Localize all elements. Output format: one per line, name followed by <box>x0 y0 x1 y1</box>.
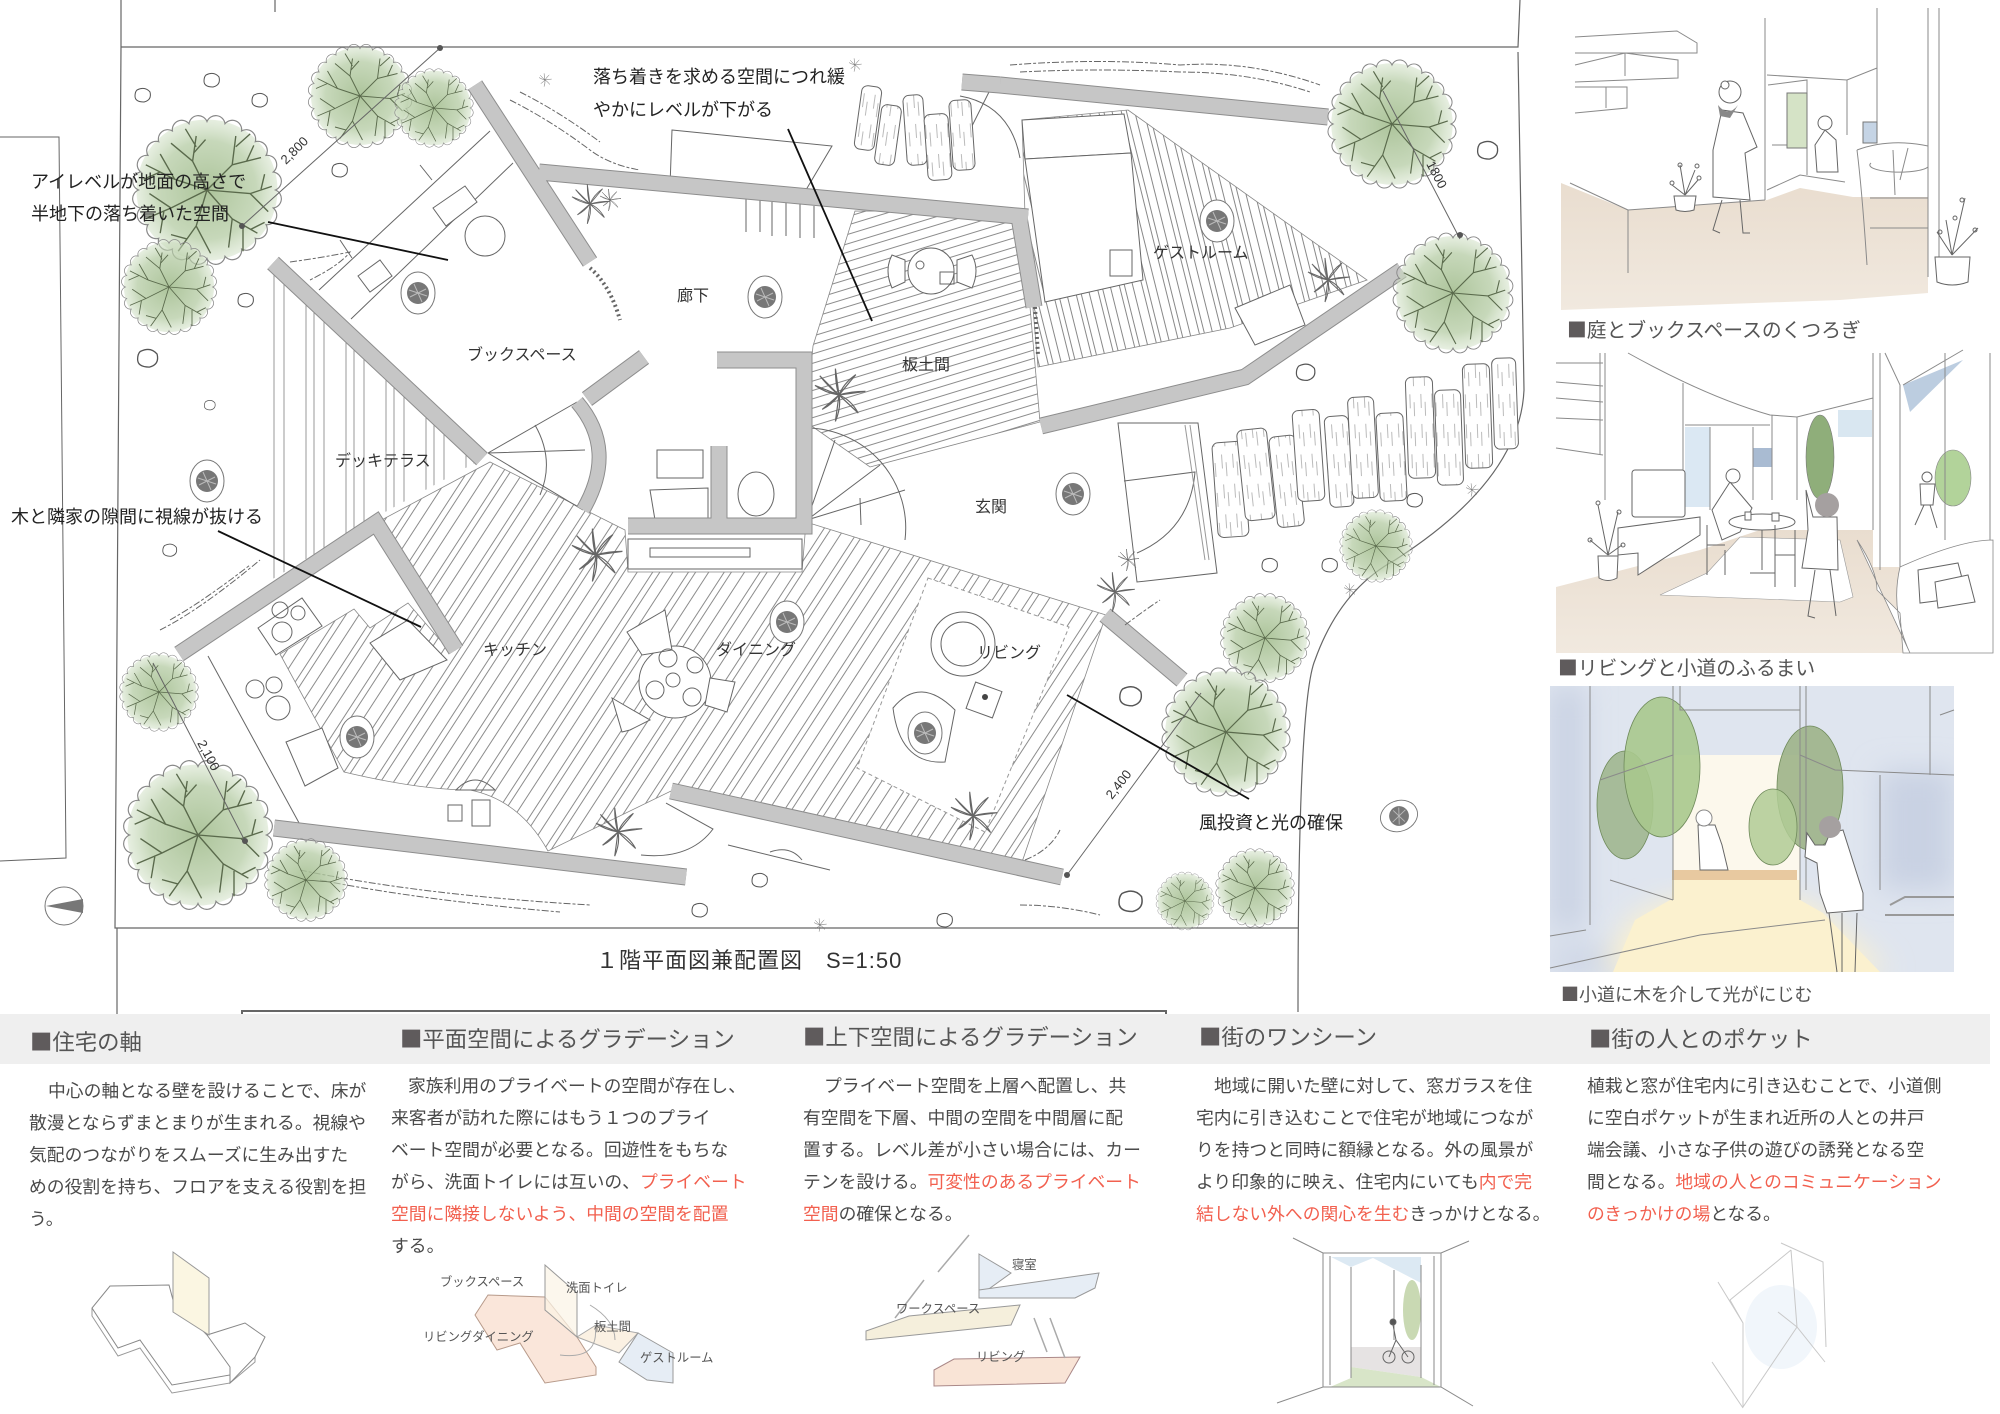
rug <box>1660 537 1853 602</box>
plant <box>1935 198 1978 285</box>
diagram: pocket <box>1712 1243 1826 1408</box>
tree <box>308 44 412 148</box>
heading: ■街の人とのポケット <box>1589 1022 1813 1054</box>
tree outside <box>1935 450 1971 506</box>
body text: めの役割を持ち、フロアを支える役割を担 <box>29 1177 366 1197</box>
tv and desk <box>1618 470 1700 575</box>
floor wash <box>1556 530 1910 653</box>
body text: 散漫とならずまとまりが生まれる。視線や <box>29 1113 366 1133</box>
body text: う。 <box>29 1209 64 1229</box>
person in white coat <box>1805 816 1863 972</box>
woman with raised arm <box>1802 490 1839 618</box>
room labels: 板土間 <box>902 356 950 374</box>
dimension: 2,400: 2,400 <box>1103 767 1134 802</box>
shrubs along walls <box>160 62 1320 915</box>
bicycle <box>728 845 830 870</box>
body text <box>1196 1076 1550 1224</box>
coil partition <box>590 268 1038 355</box>
entrance step and door <box>1118 423 1217 582</box>
chair <box>1857 143 1928 265</box>
body text: より印象的に映え、住宅内にいても内で完 <box>1196 1172 1532 1192</box>
tree behind window <box>1806 415 1834 499</box>
annotation: eye level: 半地下の落ち着いた空間 <box>31 204 229 224</box>
column 4: street scene <box>1196 1020 1550 1406</box>
tree <box>133 116 281 264</box>
body text: 有空間を下層、中間の空間を中間層に配 <box>803 1108 1123 1128</box>
interior <box>1672 755 1800 900</box>
body text: りを持つと同時に額縁となる。外の風景が <box>1196 1140 1534 1160</box>
body text: に空白ポケットが生まれ近所の人との井戸 <box>1587 1108 1925 1128</box>
tree <box>1216 849 1294 927</box>
white foreground sofa <box>1857 540 1993 653</box>
table: earth floor room <box>888 248 976 294</box>
tree <box>1393 233 1513 353</box>
dimension: 2,100 <box>153 663 248 844</box>
floor wash <box>1561 183 1928 310</box>
tree wash <box>1597 697 1843 865</box>
diagram: room gradation <box>423 1265 713 1383</box>
floor: deck terrace <box>271 265 482 580</box>
south door <box>641 803 713 856</box>
diagram: room gradation: 板土間 <box>594 1320 631 1334</box>
diagram: framed street view <box>1277 1238 1473 1406</box>
dimension: 1800 <box>1383 91 1463 239</box>
body text: 置する。レベル差が小さい場合には、カー <box>803 1140 1141 1160</box>
diagram: room gradation: ゲストルーム <box>640 1351 713 1365</box>
corridor bench <box>670 130 832 238</box>
glowing ground <box>1613 900 1880 972</box>
heading band <box>0 1014 1990 1064</box>
body text: テンを設ける。可変性のあるプライベート <box>803 1172 1141 1192</box>
diagram: room gradation: リビングダイニング <box>423 1329 534 1344</box>
body text: プライベート空間を上層へ配置し、共 <box>824 1076 1126 1096</box>
neighbouring house outline <box>0 137 66 861</box>
room labels: ダイニング <box>716 641 796 659</box>
tree <box>395 69 473 147</box>
north door <box>960 90 1020 158</box>
room labels <box>335 244 1249 662</box>
body text <box>391 1076 747 1256</box>
kitchen counter <box>208 598 338 832</box>
annotation: sight line: 木と隣家の隙間に視線が抜ける <box>11 507 263 527</box>
tree <box>1340 510 1412 582</box>
column 2: plan gradation <box>391 1022 747 1383</box>
tree <box>121 239 217 335</box>
background wash <box>1550 686 1954 972</box>
floor: guest room <box>1022 110 1367 367</box>
tree <box>1162 668 1290 796</box>
body text <box>1587 1075 1942 1224</box>
diagram: three levels: ワークスペース <box>896 1302 980 1316</box>
diagram: room gradation: 洗面トイレ <box>566 1281 628 1295</box>
dimension: 2,800 <box>239 45 443 229</box>
diagram: three levels: リビング <box>976 1350 1025 1364</box>
body text <box>803 1076 1141 1224</box>
cushions <box>1918 563 1975 608</box>
caption 2: ■リビングと小道のふるまい <box>1558 652 1815 681</box>
stepping stones: garden path <box>854 85 975 181</box>
flowers <box>539 58 1479 932</box>
standing person <box>1712 469 1752 540</box>
plant <box>1588 501 1625 580</box>
body text: 気配のつながりをスムーズに生み出すた <box>29 1145 348 1165</box>
bathroom fixtures <box>628 450 802 569</box>
lower plot frame <box>242 1011 1166 1014</box>
leader lines <box>218 129 1249 799</box>
tree <box>124 761 272 909</box>
tree <box>120 653 198 731</box>
body text: する。 <box>391 1236 444 1256</box>
room labels: キッチン <box>483 642 547 659</box>
rug: living <box>857 578 1069 832</box>
heading: ■上下空間によるグラデーション <box>803 1020 1138 1052</box>
body text: 空間に隣接しないよう、中間の空間を配置 <box>391 1204 729 1224</box>
child <box>1815 116 1838 172</box>
plan title: １階平面図兼配置図 S=1:50 <box>596 948 902 973</box>
dimension: 1800: 1800 <box>1423 158 1450 191</box>
architecture lines <box>1556 350 1990 570</box>
body text: がら、洗面トイレには互いの、プライベート <box>391 1172 747 1192</box>
annotation: wind and light: 風投資と光の確保 <box>1199 813 1343 833</box>
perspective 1: garden and book space <box>1561 8 1978 310</box>
diagram: three levels: 寝室 <box>1012 1258 1037 1272</box>
window view <box>1787 93 1807 148</box>
fan stair <box>488 402 585 510</box>
tree <box>265 839 347 921</box>
panel: site plan <box>0 0 1524 1014</box>
dimension: 2,100: 2,100 <box>194 737 223 773</box>
small figure <box>1915 472 1937 528</box>
room labels: リビング <box>977 644 1041 662</box>
body text: 空間の確保となる。 <box>803 1204 963 1224</box>
kitchen island <box>370 620 447 680</box>
diagram: room gradation: ブックスペース <box>440 1274 524 1289</box>
plant <box>1670 163 1701 212</box>
walls <box>179 82 1402 877</box>
heading: ■街のワンシーン <box>1199 1020 1377 1052</box>
windows <box>1685 360 1963 507</box>
armchairs: living <box>893 612 1002 762</box>
annotation: eye level: アイレベルが地面の高さで <box>31 172 246 192</box>
rocks <box>135 73 1498 927</box>
body text: 宅内に引き込むことで住宅が地域につなが <box>1196 1108 1534 1128</box>
floor: earth-floor room <box>806 211 1040 467</box>
luggage <box>1235 285 1305 345</box>
caption 3: ■小道に木を介して光がにじむ <box>1561 981 1812 1007</box>
table: dining <box>612 610 735 732</box>
body text: 端会議、小さな子供の遊びの誘発となる空 <box>1587 1140 1924 1160</box>
column 3: section gradation <box>803 1020 1141 1386</box>
dimension: 2,800: 2,800 <box>278 134 311 167</box>
body text: のきっかけの場となる。 <box>1587 1204 1781 1224</box>
room labels: 廊下 <box>677 287 709 305</box>
book-space counter <box>319 131 513 319</box>
soft washes <box>1550 686 1954 972</box>
dining set <box>1707 512 1795 587</box>
heading: ■住宅の軸 <box>30 1025 142 1057</box>
body text: 間となる。地域の人とのコミュニケーション <box>1587 1172 1942 1192</box>
stepping stones: entry path <box>1212 358 1519 538</box>
body text <box>29 1081 367 1229</box>
room labels: 玄関 <box>975 498 1007 516</box>
annotation: level change: やかにレベルが下がる <box>593 100 773 120</box>
room labels: デッキテラス <box>335 451 431 470</box>
annotation: level change: 落ち着きを求める空間につれ緩 <box>593 67 845 87</box>
piece of garden furniture <box>448 780 495 826</box>
tree <box>1328 60 1456 188</box>
perspective 3: alley with glowing light <box>1550 686 1954 972</box>
books <box>1863 122 1877 143</box>
people seen from above <box>190 200 1422 837</box>
site boundary <box>115 0 1524 1014</box>
caption 1: ■庭とブックスペースのくつろぎ <box>1567 314 1861 343</box>
body text: 植栽と窓が住宅内に引き込むことで、小道側 <box>1587 1075 1941 1096</box>
architecture lines <box>1570 8 1939 277</box>
compass <box>45 887 83 925</box>
dimension: 2,400 <box>1064 693 1201 878</box>
heading: ■平面空間によるグラデーション <box>400 1022 735 1054</box>
diagram: axis wall <box>92 1252 265 1393</box>
body text: ベート空間が必要となる。回遊性をもちな <box>391 1140 728 1160</box>
column 1: axis of the house <box>29 1025 367 1393</box>
woman in coat <box>1713 81 1757 233</box>
room labels: ブックスペース <box>467 345 577 364</box>
spiral stair <box>807 428 906 540</box>
floor: dining and living boards <box>280 462 1106 868</box>
column 5: pocket for neighbours <box>1587 1022 1942 1408</box>
perspective 2: living and alley <box>1556 350 1993 653</box>
diagram: three levels <box>866 1235 1099 1386</box>
paving <box>1885 897 1954 915</box>
body text: 家族利用のプライベートの空間が存在し、 <box>408 1076 746 1096</box>
annotation: eye level <box>31 172 246 224</box>
body text: 結しない外への関心を生むきっかけとなる。 <box>1196 1204 1550 1224</box>
tree <box>1156 872 1214 930</box>
body text: 中心の軸となる壁を設けることで、床が <box>48 1081 367 1101</box>
room labels: ゲストルーム <box>1153 244 1249 262</box>
tree <box>1221 594 1309 682</box>
building lines <box>1550 686 1954 968</box>
annotation: level change <box>593 67 845 120</box>
body text: 地域に開いた壁に対して、窓ガラスを住 <box>1214 1076 1533 1096</box>
interior figures <box>1696 810 1728 870</box>
bed <box>1022 114 1143 302</box>
body text: 来客者が訪れた際にはもう１つのプライ <box>391 1108 711 1128</box>
